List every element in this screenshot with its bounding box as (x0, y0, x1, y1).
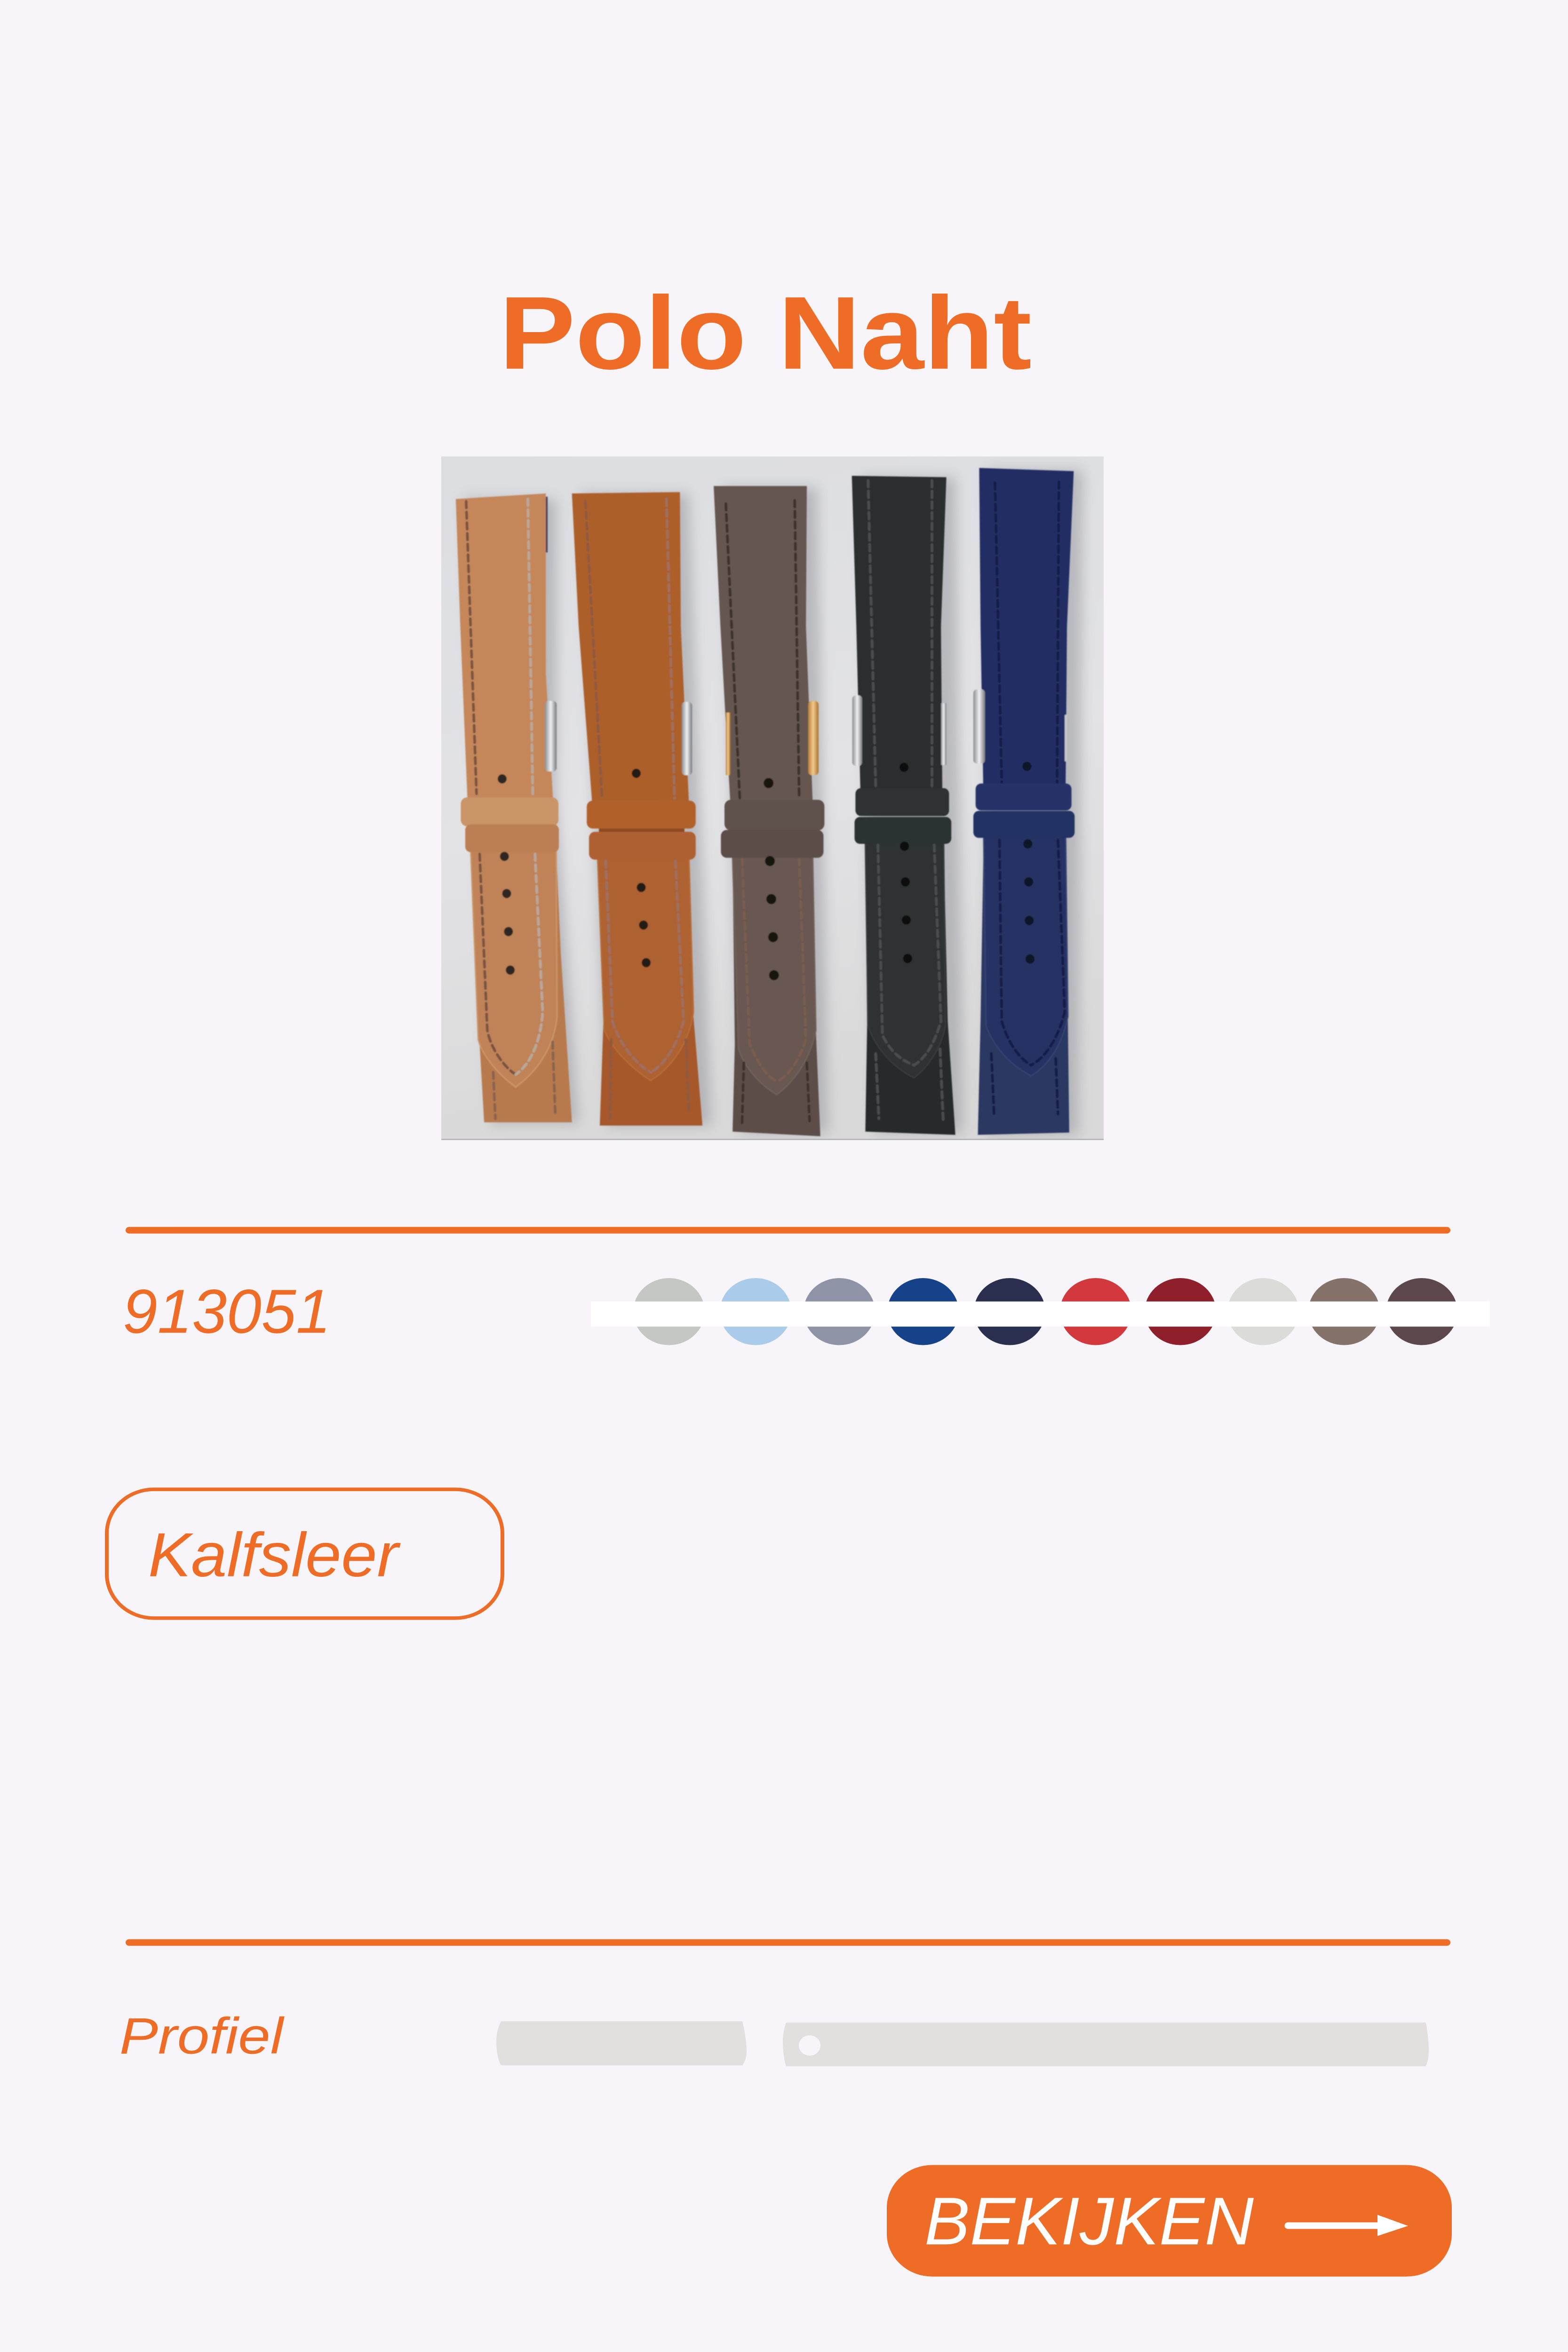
profile shape: strap with hole (783, 2023, 1429, 2066)
material tag: Kalfsleer (148, 1520, 401, 1589)
strap 3: dark brown (714, 486, 824, 1136)
view button: BEKIJKEN (924, 2184, 1254, 2259)
title: Polo Naht (499, 276, 1032, 391)
article number: 913051 (123, 1276, 331, 1346)
arrow icon (1284, 2215, 1408, 2236)
strap 2: cognac (572, 492, 702, 1126)
colour swatches (591, 1278, 1490, 1345)
bottom divider (126, 1939, 1450, 1946)
strap 5: navy (973, 468, 1075, 1135)
profile label: Profiel (119, 2007, 285, 2064)
strap 1: tan (456, 493, 572, 1122)
product photo: five leather watch straps (441, 456, 1104, 1140)
material tag (107, 1489, 502, 1618)
profile shape: keeper end (496, 2021, 747, 2066)
top divider (126, 1227, 1450, 1233)
view button (887, 2165, 1452, 2277)
strap 4: black (852, 476, 955, 1135)
